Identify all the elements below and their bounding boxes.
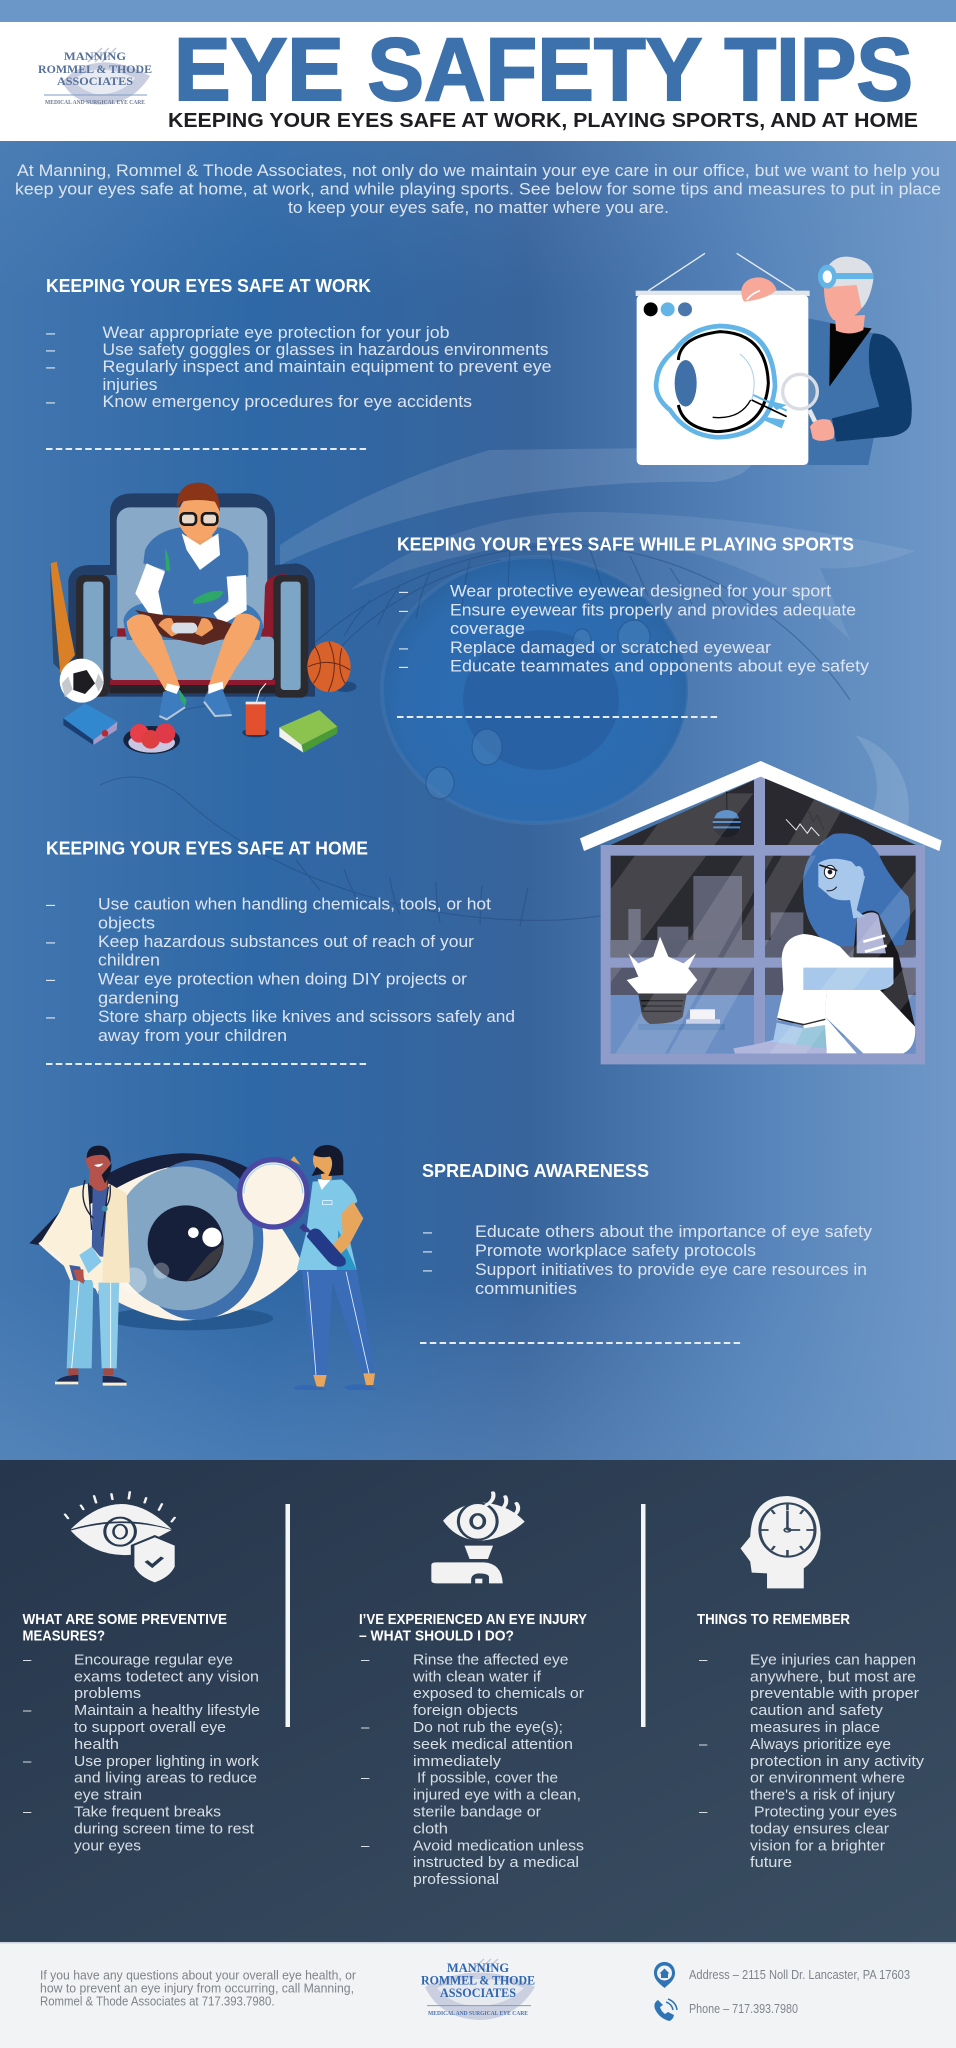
bullet list bbox=[399, 582, 870, 676]
bullet list: Replace damaged or scratched eyewear bbox=[450, 639, 772, 657]
illustration: doctors with giant eye bbox=[29, 1145, 378, 1390]
column: preventive measures bbox=[22, 1612, 260, 1854]
bullet list: – bbox=[399, 658, 409, 676]
column: things to remember: preventable with proper bbox=[750, 1685, 919, 1702]
column: things to remember: future bbox=[750, 1854, 792, 1871]
footer bbox=[0, 1942, 956, 2048]
logo: header: ROMMEL & THODE bbox=[38, 62, 152, 76]
column: eye injury: I’VE EXPERIENCED AN EYE INJURY bbox=[359, 1612, 587, 1628]
heading: KEEPING YOUR EYES SAFE WHILE PLAYING SPORTS bbox=[397, 535, 854, 555]
panel: safe at work bbox=[46, 276, 552, 449]
footer text bbox=[40, 1967, 357, 2009]
column: things to remember: measures in place bbox=[750, 1719, 880, 1736]
column: preventive measures: WHAT ARE SOME PREVENTIVE bbox=[22, 1612, 227, 1628]
icon: phone bbox=[654, 1999, 677, 2021]
bullet list: – bbox=[46, 324, 56, 342]
column: eye injury: – bbox=[361, 1837, 370, 1854]
bullet list bbox=[46, 324, 552, 411]
panel: spreading awareness bbox=[420, 1161, 873, 1343]
column: things to remember: – bbox=[699, 1804, 708, 1820]
bullet list: Keep hazardous substances out of reach of your bbox=[98, 933, 475, 951]
column: preventive measures: – bbox=[23, 1651, 32, 1668]
column: eye injury: Avoid medication unless bbox=[413, 1837, 584, 1854]
bullet list bbox=[423, 1223, 873, 1298]
intro text: At Manning, Rommel & Thode Associates, not only do we maintain your eye care in our office, but we want to help you bbox=[17, 162, 940, 180]
panel: safe while playing sports bbox=[397, 535, 870, 717]
column: eye injury: foreign objects bbox=[413, 1702, 518, 1719]
logo: footer: MEDICAL AND SURGICAL EYE CARE bbox=[428, 2011, 528, 2017]
column: preventive measures: exams todetect any vision bbox=[74, 1668, 259, 1685]
logo: footer: ROMMEL & THODE bbox=[421, 1974, 535, 1988]
column: preventive measures: your eyes bbox=[74, 1837, 141, 1854]
heading: SPREADING AWARENESS bbox=[422, 1161, 649, 1181]
column: preventive measures: during screen time to rest bbox=[74, 1820, 255, 1837]
column: things to remember: vision for a brighter bbox=[750, 1837, 885, 1854]
column: things to remember: Always prioritize eye bbox=[750, 1736, 891, 1753]
bullet list: Promote workplace safety protocols bbox=[475, 1242, 756, 1260]
bullet list: – bbox=[423, 1261, 433, 1279]
bullet list: – bbox=[46, 933, 56, 951]
bullet list: Wear protective eyewear designed for your sport bbox=[450, 582, 832, 600]
illustration: man on armchair with sports gear bbox=[50, 483, 357, 754]
bullet list: – bbox=[46, 896, 56, 914]
heading: KEEPING YOUR EYES SAFE AT WORK bbox=[46, 276, 371, 296]
icon: location pin bbox=[654, 1962, 675, 1988]
icon: eye and eye wash bbox=[431, 1493, 525, 1583]
column: eye injury: Rinse the affected eye bbox=[413, 1651, 568, 1668]
column: eye injury: cloth bbox=[413, 1820, 448, 1837]
illustration: house with worried girl bbox=[580, 761, 942, 1064]
column: things to remember: anywhere, but most are bbox=[750, 1668, 916, 1685]
logo: header: MANNING bbox=[64, 49, 126, 63]
bullet list: Educate others about the importance of eye safety bbox=[475, 1223, 873, 1241]
column: preventive measures: and living areas to reduce bbox=[74, 1770, 257, 1787]
bullet list: Wear appropriate eye protection for your job bbox=[102, 324, 450, 342]
column: things to remember: today ensures clear bbox=[750, 1820, 889, 1837]
bullet list: Use safety goggles or glasses in hazardous environments bbox=[102, 341, 548, 359]
doctor left bbox=[40, 1146, 130, 1386]
top band bbox=[0, 0, 956, 22]
column: preventive measures: health bbox=[74, 1736, 119, 1753]
subtitle: KEEPING YOUR EYES SAFE AT WORK, PLAYING SPORTS, AND AT HOME bbox=[168, 109, 918, 132]
column: eye injury: sterile bandage or bbox=[413, 1804, 541, 1820]
column: things to remember: Protecting your eyes bbox=[754, 1804, 897, 1820]
column: eye injury: – bbox=[361, 1719, 370, 1736]
column: things to remember: THINGS TO REMEMBER bbox=[697, 1612, 850, 1628]
footer text: If you have any questions about your overall eye health, or bbox=[40, 1967, 357, 1982]
phone: Phone – 717.393.7980 bbox=[689, 2001, 798, 2016]
column: preventive measures: MEASURES? bbox=[22, 1629, 105, 1645]
bullet list: children bbox=[98, 952, 160, 970]
column: things to remember: – bbox=[699, 1736, 708, 1753]
bullet list: coverage bbox=[450, 620, 525, 638]
column: eye injury: instructed by a medical bbox=[413, 1854, 579, 1871]
column: eye injury: with clean water if bbox=[412, 1668, 542, 1685]
icon: eye with shield bbox=[65, 1492, 178, 1585]
column: eye injury: – bbox=[361, 1651, 370, 1668]
illustration: doctor with eye chart bbox=[636, 253, 912, 465]
logo: header: MEDICAL AND SURGICAL EYE CARE bbox=[45, 100, 145, 106]
background bbox=[0, 0, 956, 1462]
address: Address – 2115 Noll Dr. Lancaster, PA 17603 bbox=[689, 1967, 910, 1982]
header band bbox=[0, 19, 956, 141]
bullet list: – bbox=[399, 602, 409, 620]
intro text: to keep your eyes safe, no matter where you are. bbox=[288, 199, 669, 217]
bullet list: objects bbox=[98, 914, 155, 932]
heading: KEEPING YOUR EYES SAFE AT HOME bbox=[46, 839, 368, 859]
title: EYE SAFETY TIPS bbox=[174, 19, 913, 119]
logo: footer: ASSOCIATES bbox=[440, 1986, 516, 2000]
column: eye injury: injured eye with a clean, bbox=[413, 1787, 581, 1804]
bullet list: injuries bbox=[102, 376, 158, 394]
bullet list: Ensure eyewear fits properly and provides adequate bbox=[450, 602, 856, 620]
column: preventive measures: Use proper lighting in work bbox=[74, 1753, 260, 1770]
nurse right bbox=[291, 1145, 378, 1390]
column: eye injury: If possible, cover the bbox=[417, 1770, 558, 1787]
bullet list: communities bbox=[475, 1280, 577, 1298]
bullet list: – bbox=[399, 582, 409, 600]
footer text: how to prevent an eye injury from occurring, call Manning, bbox=[40, 1980, 354, 1995]
column: eye injury bbox=[359, 1612, 587, 1888]
bullet list: – bbox=[423, 1223, 433, 1241]
bullet list: – bbox=[46, 1008, 56, 1026]
girl bbox=[733, 833, 915, 1054]
bullet list: gardening bbox=[98, 990, 179, 1008]
column: things to remember: there's a risk of injury bbox=[750, 1787, 896, 1804]
column: preventive measures: eye strain bbox=[74, 1787, 142, 1804]
bullet list: – bbox=[399, 639, 409, 657]
column: preventive measures: problems bbox=[74, 1685, 141, 1702]
column: preventive measures: – bbox=[23, 1702, 32, 1719]
dark panel bbox=[0, 1460, 956, 1943]
column: things to remember bbox=[697, 1612, 925, 1871]
panel: safe at home bbox=[46, 839, 515, 1064]
bullet list: Educate teammates and opponents about eye safety bbox=[450, 658, 870, 676]
footer text: Rommel & Thode Associates at 717.393.7980. bbox=[40, 1994, 274, 2009]
intro text bbox=[15, 162, 941, 217]
bullet list: – bbox=[423, 1242, 433, 1260]
column: eye injury: professional bbox=[413, 1871, 499, 1888]
column: preventive measures: – bbox=[23, 1753, 32, 1770]
column: preventive measures: – bbox=[23, 1804, 32, 1820]
column: preventive measures: Maintain a healthy lifestyle bbox=[74, 1702, 260, 1719]
column: preventive measures: to support overall eye bbox=[74, 1719, 226, 1736]
column: eye injury: Do not rub the eye(s); bbox=[413, 1719, 563, 1736]
logo: footer: MANNING bbox=[447, 1961, 509, 1975]
bullet list: – bbox=[46, 971, 56, 989]
column: eye injury: exposed to chemicals or bbox=[413, 1685, 584, 1702]
logo: footer bbox=[421, 1959, 535, 2020]
column: things to remember: or environment where bbox=[750, 1770, 905, 1787]
bullet list: Store sharp objects like knives and scissors safely and bbox=[98, 1008, 515, 1026]
column: preventive measures: Take frequent breaks bbox=[74, 1804, 221, 1820]
logo: header bbox=[38, 48, 152, 106]
column: eye injury: – bbox=[361, 1770, 370, 1787]
column: eye injury: immediately bbox=[413, 1753, 502, 1770]
column: preventive measures: Encourage regular eye bbox=[74, 1651, 233, 1668]
bullet list bbox=[46, 896, 515, 1045]
bullet list: – bbox=[46, 358, 56, 376]
bullet list: Know emergency procedures for eye accidents bbox=[102, 393, 472, 411]
column: things to remember: caution and safety bbox=[750, 1702, 884, 1719]
intro text: keep your eyes safe at home, at work, and while playing sports. See below for some tips and measures to put in place bbox=[15, 180, 941, 198]
bullet list: Wear eye protection when doing DIY projects or bbox=[98, 971, 468, 989]
column: things to remember: Eye injuries can happen bbox=[750, 1651, 916, 1668]
bullet list: Use caution when handling chemicals, tools, or hot bbox=[98, 896, 491, 914]
background eye illustration bbox=[100, 447, 915, 926]
column: eye injury: seek medical attention bbox=[413, 1736, 573, 1753]
column: things to remember: protection in any activity bbox=[750, 1753, 925, 1770]
bullet list: – bbox=[46, 393, 56, 411]
column: eye injury: – WHAT SHOULD I DO? bbox=[359, 1629, 514, 1645]
column: things to remember: – bbox=[699, 1651, 708, 1668]
bullet list: Regularly inspect and maintain equipment to prevent eye bbox=[102, 358, 552, 376]
icon: head with clock bbox=[741, 1496, 821, 1588]
logo: header: ASSOCIATES bbox=[57, 74, 133, 88]
bullet list: Support initiatives to provide eye care resources in bbox=[475, 1261, 867, 1279]
bullet list: – bbox=[46, 341, 56, 359]
bullet list: away from your children bbox=[98, 1027, 287, 1045]
